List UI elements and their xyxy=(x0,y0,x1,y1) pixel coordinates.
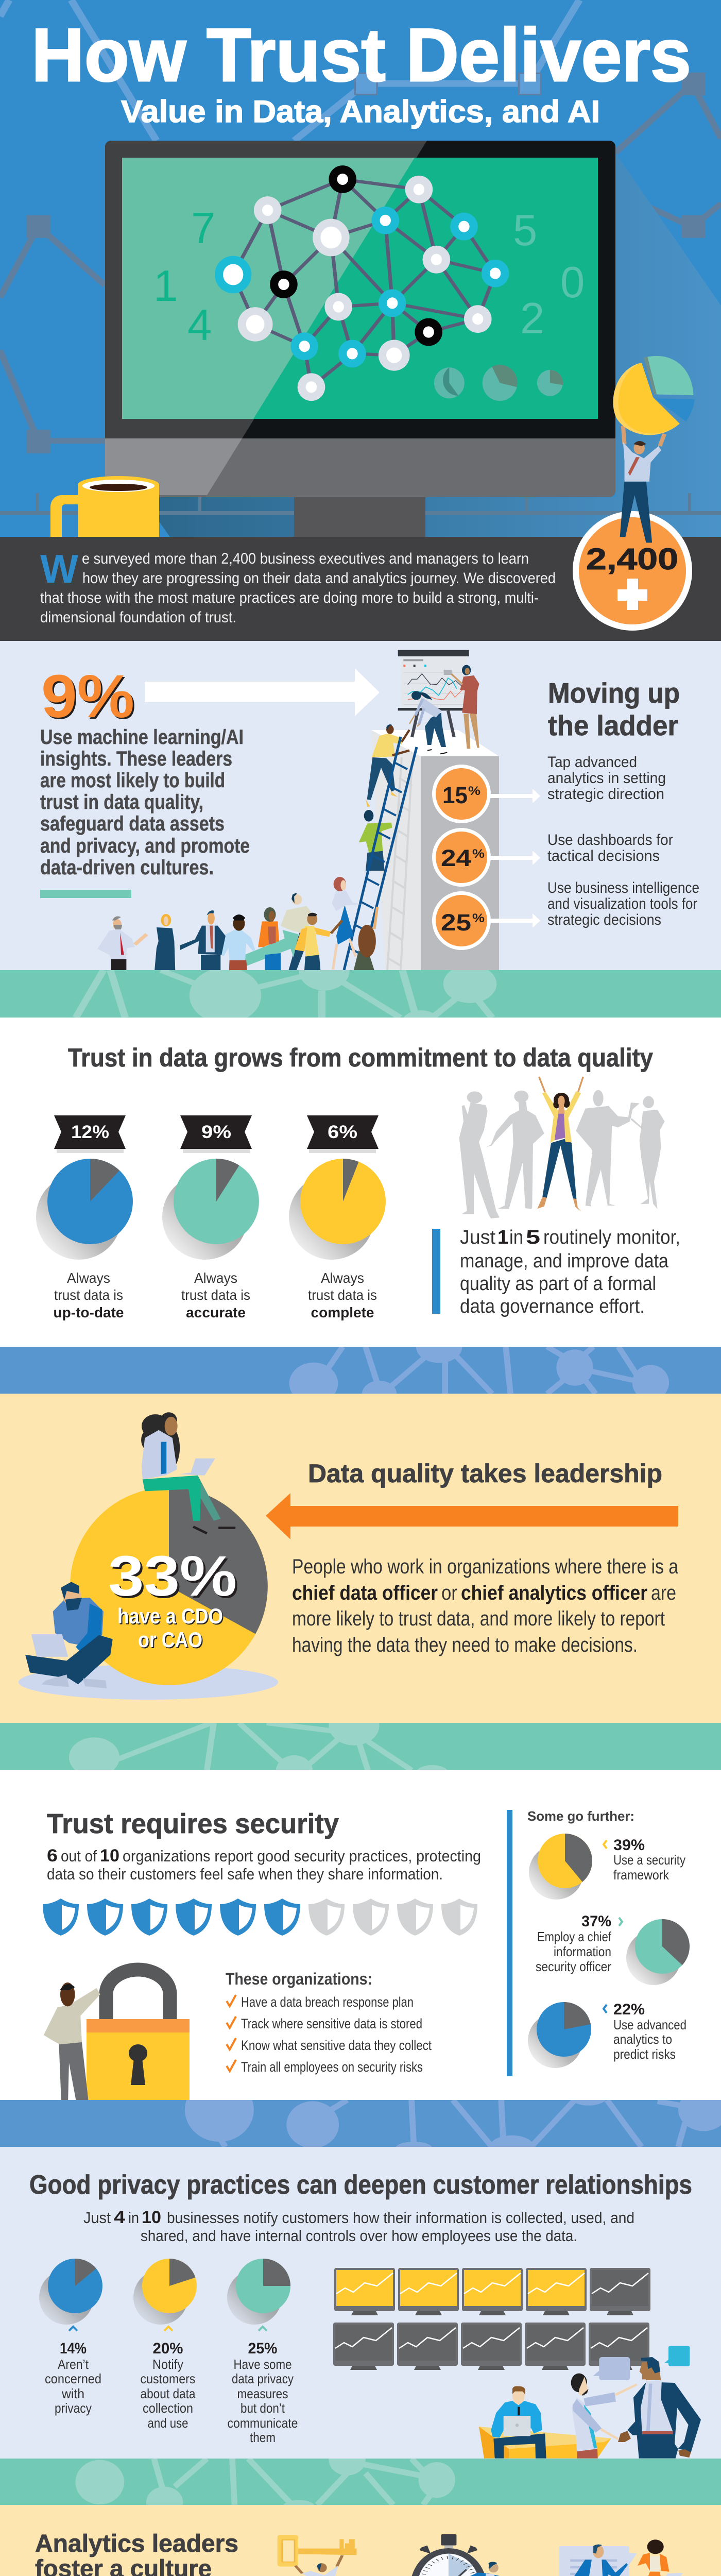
title: Value in Data, Analytics, and AI xyxy=(121,94,600,129)
panel: privacy practices xyxy=(0,2147,721,2459)
text: 4 in 10: in xyxy=(128,2209,139,2227)
list: these organizations: These organizations: xyxy=(226,1970,372,1988)
icon: collaboration scene xyxy=(559,2539,685,2576)
text: ladder items: analytics in setting xyxy=(547,770,666,787)
pie chart: 22% predict risks: 22% xyxy=(613,2001,645,2018)
pie chart: 25% don't communicate: Have some xyxy=(234,2357,291,2372)
icons: shields 6 of 10 xyxy=(43,1899,477,1936)
pie chart: 37% chief information security officer xyxy=(536,1913,690,1985)
arrow: white pointing right xyxy=(145,668,380,716)
pie chart: 20% notify customers: collection xyxy=(143,2400,193,2416)
text: 6 out of 10: data so their customers feel safe when they share information. xyxy=(47,1865,443,1883)
text: ladder items: strategic direction xyxy=(547,786,664,803)
text: 4 in 10: 10 xyxy=(142,2208,161,2227)
text: machine learning insight xyxy=(40,726,250,879)
illustration: crowd of colleagues xyxy=(97,877,377,970)
pie chart: 20% notify customers xyxy=(133,2259,197,2431)
heading: Analytics leaders xyxy=(35,2530,238,2557)
pie chart: 22% predict risks: Use advanced xyxy=(613,2017,686,2032)
title: How Trust Delivers xyxy=(31,13,691,97)
band: blue network 2 xyxy=(0,2100,721,2147)
pie chart: 39% security framework: 39% xyxy=(613,1837,645,1854)
text: chief data officer: chief analytics officer xyxy=(461,1582,647,1604)
drop cap: W xyxy=(40,546,78,591)
pie chart: 20% notify customers: and use xyxy=(147,2415,188,2431)
list: these organizations xyxy=(226,1970,432,2075)
badge: 15% xyxy=(432,765,491,823)
illustration: climbers on ladder and presenters xyxy=(359,665,479,871)
pie chart: accurate 9% xyxy=(162,1115,259,1320)
intro text xyxy=(40,550,556,626)
text: 6 out of 10 xyxy=(47,1846,481,1883)
screen digits: 1 xyxy=(153,262,178,311)
heading: moving up the ladder xyxy=(548,677,680,741)
pie chart: up-to-date 12%: trust data is xyxy=(54,1287,123,1303)
pie chart: complete 6%: trust data is xyxy=(308,1287,377,1303)
text: ladder items: and visualization tools for xyxy=(547,895,697,912)
pie chart: complete 6%: complete xyxy=(311,1304,374,1320)
text: 1 in 5: 1 xyxy=(497,1227,508,1248)
text: 4 in 10: businesses notify customers how their information is collected, used, and xyxy=(167,2209,634,2227)
pie chart: 22% predict risks: predict risks xyxy=(613,2046,676,2062)
illustration: tower xyxy=(371,730,499,970)
badge: 24%: % xyxy=(472,847,485,861)
statistic text: 33%: or CAO xyxy=(138,1628,202,1652)
heading: Trust in data grows from commitment to data quality xyxy=(68,1043,653,1072)
heading xyxy=(35,2530,238,2576)
illustration: man lifting pie chart xyxy=(613,356,694,543)
heading: moving up the ladder: the ladder xyxy=(548,709,678,741)
pie chart: 14% not concerned: with xyxy=(61,2386,84,2401)
screen digits: 4 xyxy=(187,301,212,350)
pie chart: 37% chief information security officer: Employ a chief xyxy=(537,1929,612,1944)
badge: 25% xyxy=(432,891,491,950)
text: 1 in 5: Just xyxy=(460,1227,495,1248)
accent bar xyxy=(40,890,131,898)
pie chart: complete 6% xyxy=(289,1115,386,1320)
icon: stopwatch and runner xyxy=(410,2534,522,2576)
arrows: white to labels xyxy=(490,789,540,928)
pie chart: 22% predict risks: analytics to xyxy=(613,2031,672,2047)
text: 1 in 5: routinely monitor, xyxy=(543,1227,680,1248)
panel: intro band xyxy=(0,537,721,641)
icon: coffee mug xyxy=(50,476,159,537)
badge: 25%: % xyxy=(472,911,485,925)
text: 6 out of 10: 6 xyxy=(47,1846,58,1866)
intro text: e surveyed more than 2,400 business executives and managers to learn xyxy=(82,550,529,567)
text: 1 in 5: quality as part of a formal xyxy=(460,1273,656,1295)
text: 6 out of 10: organizations report good security practices, protecting xyxy=(123,1847,481,1865)
badge: 25%: 25 xyxy=(441,909,471,936)
pie chart: 25% don't communicate: but don’t xyxy=(241,2400,285,2416)
band: blue network xyxy=(0,1347,721,1394)
pie chart: accurate 9%: Always xyxy=(194,1270,237,1286)
pie chart: up-to-date 12%: up-to-date xyxy=(54,1304,124,1320)
icon: key and man xyxy=(278,2535,358,2576)
pie chart: 14% not concerned: privacy xyxy=(55,2400,92,2416)
statistic: 9%: 9% xyxy=(43,664,136,732)
pie chart: 20% notify customers: Notify xyxy=(152,2357,183,2372)
band: teal network 2 xyxy=(0,1723,721,1770)
text: machine learning insight: trust in data quality, xyxy=(40,791,203,814)
pie chart: 25% don't communicate: data privacy xyxy=(232,2371,294,2386)
panel: moving up the ladder xyxy=(0,641,721,970)
intro text: that those with the most mature practices are doing more to build a strong, multi- xyxy=(40,589,539,606)
badge: 24% xyxy=(432,828,491,887)
pie chart: 14% not concerned: 14% xyxy=(60,2340,87,2357)
pie chart: accurate 9%: 9% xyxy=(201,1122,231,1142)
text: 6 out of 10: out of xyxy=(61,1847,97,1865)
monitors: 4 of 10 highlighted xyxy=(333,2268,650,2370)
background network pattern xyxy=(0,0,721,453)
screen mini pies xyxy=(434,365,563,401)
intro text: how they are progressing on their data and analytics journey. We discovered xyxy=(82,570,556,587)
percent badges and arrows xyxy=(432,765,540,950)
text: machine learning insight: data-driven cultures. xyxy=(40,856,214,879)
panel: data quality takes leadership xyxy=(0,1394,721,1723)
statistic text: 33%: or CAO xyxy=(139,1629,203,1653)
text: ladder items: tactical decisions xyxy=(547,848,660,865)
data network graph xyxy=(215,165,509,401)
badge: 2,400+ circle: 2,400 xyxy=(586,543,678,576)
pie chart: 37% chief information security officer: information xyxy=(554,1944,611,1959)
text: ladder items: strategic decisions xyxy=(547,911,661,928)
pie chart: 25% don't communicate: them xyxy=(250,2430,276,2445)
illustration: colleagues talking xyxy=(479,2346,701,2459)
heading: Data quality takes leadership xyxy=(308,1459,662,1488)
text: machine learning insight: insights. These leaders xyxy=(40,748,232,770)
list: these organizations: Know what sensitive data they collect xyxy=(241,2038,432,2053)
list item checks xyxy=(227,1995,236,2071)
illustration: computer monitor xyxy=(105,141,615,537)
screen digits: 0 xyxy=(560,258,585,307)
pie chart: complete 6%: Always xyxy=(321,1270,364,1286)
text: 1 in 5: 5 xyxy=(526,1227,540,1248)
pie chart: 25% don't communicate: measures xyxy=(237,2386,288,2401)
pie chart: up-to-date 12%: 12% xyxy=(71,1122,109,1142)
pie chart: accurate 9%: accurate xyxy=(186,1304,246,1320)
badge: 15%: % xyxy=(468,784,480,798)
statistic text: 33% xyxy=(108,1545,239,1653)
text: machine learning insight: Use machine learning/AI xyxy=(40,726,244,749)
pie chart: 14% not concerned: Aren’t xyxy=(58,2357,89,2372)
list: these organizations: Have a data breach response plan xyxy=(241,1994,414,2010)
pie chart: 22% predict risks xyxy=(528,2001,686,2068)
illustration: man with laptop xyxy=(25,1582,113,1688)
text: 4 in 10: Just xyxy=(83,2209,111,2227)
pie chart: 39% security framework: framework xyxy=(613,1867,670,1883)
pie chart: 25% don't communicate: communicate xyxy=(228,2415,298,2431)
text: 1 in 5: data governance effort. xyxy=(460,1296,645,1317)
illustration: woman on pie xyxy=(141,1412,235,1533)
divider bar xyxy=(507,1810,512,2076)
text: ladder items: Use dashboards for xyxy=(547,832,673,849)
statistic text: 33%: 33% xyxy=(110,1547,239,1610)
pie chart: 14% not concerned xyxy=(39,2259,102,2416)
pie chart: up-to-date 12%: Always xyxy=(67,1270,110,1286)
panel: trust requires security xyxy=(0,1770,721,2100)
text: chief data officer xyxy=(292,1555,679,1656)
heading: moving up the ladder: Moving up xyxy=(548,677,680,709)
illustration: ladder xyxy=(344,737,417,970)
list: these organizations: Track where sensitive data is stored xyxy=(241,2016,422,2031)
pie chart: accurate 9%: trust data is xyxy=(181,1287,250,1303)
illustration: padlock xyxy=(87,1970,190,2100)
monitor shadow xyxy=(105,153,721,537)
text: chief data officer: are xyxy=(651,1582,676,1604)
shelf rail xyxy=(0,493,721,515)
badge: 15%: 15 xyxy=(442,782,468,808)
badge: 2,400+ circle xyxy=(573,511,692,631)
accent bar xyxy=(432,1229,440,1314)
text: 1 in 5 xyxy=(460,1227,680,1317)
text: 4 in 10 xyxy=(83,2208,634,2245)
panel: analytics leaders xyxy=(0,2505,721,2576)
pie chart: 33% have a CDO or CAO xyxy=(19,1487,278,1700)
band: teal network xyxy=(0,970,721,1018)
list: these organizations: Train all employees on security risks xyxy=(241,2059,423,2075)
pie chart: 25% don't communicate: 25% xyxy=(248,2340,277,2357)
illustration: man beside padlock xyxy=(44,1982,100,2100)
pie chart: 14% not concerned: concerned xyxy=(45,2371,101,2386)
illustration: silhouettes with highlighted woman xyxy=(459,1077,665,1218)
statistic: 9%: 9% xyxy=(41,663,134,731)
pie chart: 20% notify customers: about data xyxy=(140,2386,196,2401)
text: ladder items: Use business intelligence xyxy=(547,879,699,896)
illustration: presentation board xyxy=(398,650,469,737)
screen digits xyxy=(153,204,585,350)
band: teal network 3 xyxy=(0,2459,721,2505)
text: machine learning insight: safeguard data assets xyxy=(40,812,225,835)
screen digits: 2 xyxy=(520,294,544,343)
pie chart: 20% notify customers: 20% xyxy=(152,2340,183,2357)
statistic text: 33%: have a CDO xyxy=(117,1604,223,1628)
intro text: dimensional foundation of trust. xyxy=(40,609,236,626)
pie chart: 39% security framework: Use a security xyxy=(613,1852,685,1868)
panel: header xyxy=(0,0,721,537)
text: chief data officer: or xyxy=(441,1582,457,1604)
text: chief data officer: chief data officer xyxy=(292,1582,438,1604)
screen digits: 5 xyxy=(513,206,537,255)
text: machine learning insight: are most likely to build xyxy=(40,769,225,792)
screen digits: 7 xyxy=(191,204,215,253)
text: ladder items: Tap advanced xyxy=(547,754,637,771)
text: machine learning insight: and privacy, and promote xyxy=(40,835,250,857)
pie chart: up-to-date 12% xyxy=(36,1115,133,1320)
panel: trust in data xyxy=(0,1018,721,1347)
pie chart: complete 6%: 6% xyxy=(328,1122,357,1142)
pie chart: 37% chief information security officer: 37% xyxy=(581,1913,611,1930)
text: 1 in 5: manage, and improve data xyxy=(460,1250,669,1272)
heading: some go further: Some go further: xyxy=(527,1808,634,1824)
badge: 24%: 24 xyxy=(441,845,471,871)
text: 6 out of 10: 10 xyxy=(100,1846,119,1866)
pie chart: 25% don't communicate xyxy=(227,2259,298,2445)
statistic text: 33%: 33% xyxy=(108,1545,237,1608)
arrow: orange pointing left xyxy=(266,1493,678,1539)
text: 1 in 5: in xyxy=(509,1227,523,1248)
text: ladder items xyxy=(547,754,699,928)
text: 4 in 10: 4 xyxy=(114,2208,125,2227)
statistic text: 33%: have a CDO xyxy=(118,1605,224,1629)
text: chief data officer: having the data they need to make decisions. xyxy=(292,1634,638,1656)
text: 4 in 10: shared, and have internal controls over how employees use the data. xyxy=(141,2227,577,2245)
heading: Trust requires security xyxy=(47,1808,339,1839)
pie chart: 39% security framework xyxy=(529,1834,685,1900)
pie chart: 37% chief information security officer: security officer xyxy=(536,1959,611,1974)
pie chart: 20% notify customers: customers xyxy=(140,2371,196,2386)
